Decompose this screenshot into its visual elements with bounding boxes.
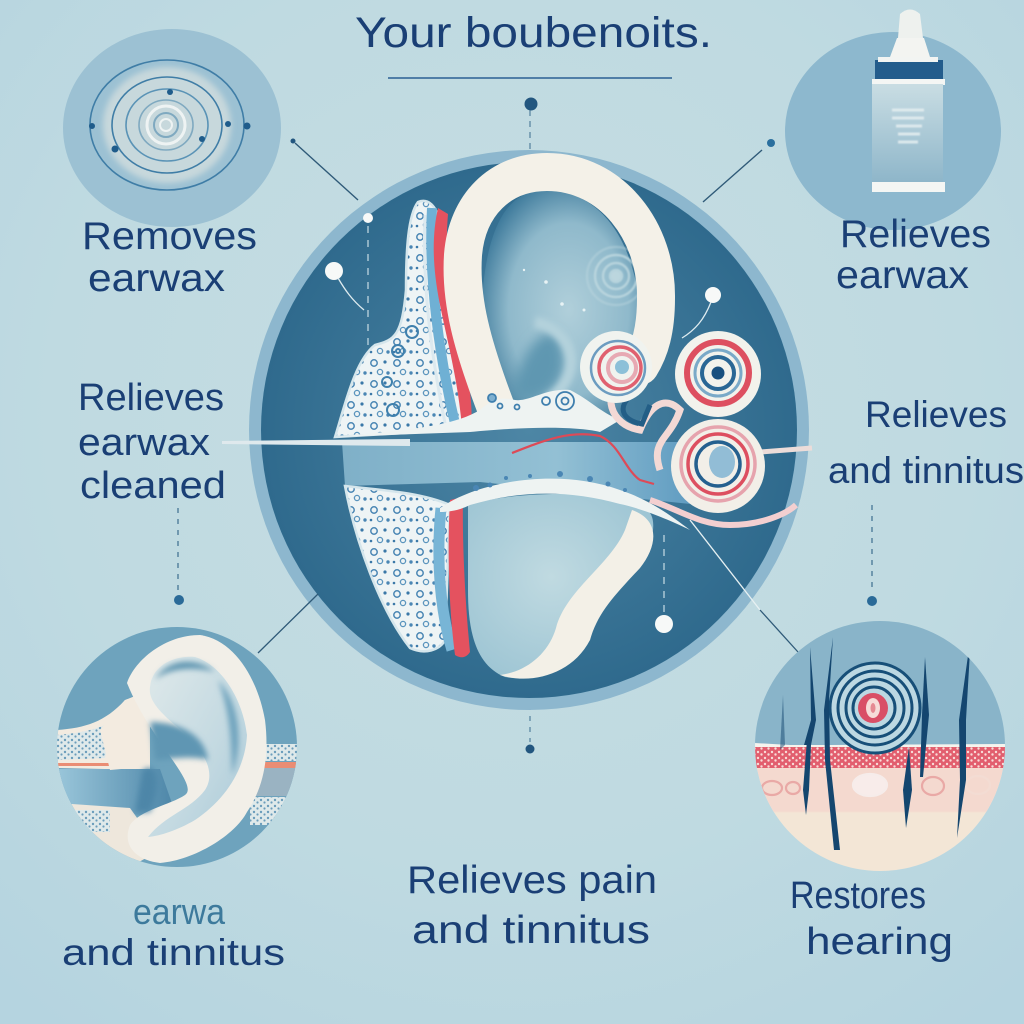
coil three — [671, 419, 765, 513]
connector: top dot — [524, 98, 538, 150]
spiral connector — [611, 370, 680, 470]
white marker: lower — [655, 535, 673, 633]
label: relieves and tinnitus — [828, 394, 1024, 491]
bottle body — [872, 84, 943, 184]
label: restores hearing: Restores — [790, 875, 926, 917]
connector: left dot — [174, 508, 184, 605]
wax specks — [89, 89, 250, 152]
bowl top shadow — [155, 662, 215, 680]
label: restores hearing — [790, 875, 953, 963]
connector: bottom dot — [526, 705, 534, 754]
label: removes earwax — [82, 215, 257, 300]
label: removes earwax: earwax — [88, 257, 226, 300]
white skin line — [755, 743, 1005, 750]
label: relieves pain and tinnitus — [407, 859, 657, 952]
canal band — [342, 442, 700, 505]
cap top rim — [878, 57, 938, 62]
right tissue — [266, 744, 297, 761]
upper tissue red layer — [434, 208, 472, 428]
outer ring — [249, 150, 809, 710]
white marker: left — [325, 262, 364, 310]
canal shadow — [135, 768, 157, 812]
connector: bottom right — [690, 520, 798, 652]
label: relieves earwax cleaned: cleaned — [80, 465, 226, 507]
bottle nozzle — [898, 10, 923, 38]
tissue lower dots — [74, 810, 110, 832]
concha shadow — [512, 333, 564, 400]
bowl centre shadow — [150, 722, 208, 760]
right stripe — [264, 762, 296, 768]
label: relieves earwax cleaned — [78, 377, 226, 507]
ear inner bowl — [148, 657, 247, 837]
label: earwax and tinnitus: and tinnitus — [62, 932, 285, 973]
bottle shoulder — [890, 38, 930, 57]
red nerve — [512, 434, 654, 484]
upper tissue — [335, 201, 470, 437]
lower tissue blue layers — [439, 508, 452, 650]
dark disc — [261, 162, 797, 698]
spiral connector core — [623, 395, 650, 424]
upper canal edge — [335, 390, 620, 437]
bottle base — [872, 182, 945, 192]
tissue blobs — [762, 773, 945, 797]
helix — [463, 172, 656, 408]
tissue upper — [57, 726, 106, 760]
label: relieves pain and tinnitus: Relieves pain — [407, 859, 657, 902]
label: restores hearing: hearing — [806, 921, 953, 963]
cream layer — [755, 765, 1005, 875]
front flesh — [57, 690, 150, 770]
ear outer shape — [127, 635, 266, 863]
label: relieves earwax cleaned: Relieves — [78, 377, 224, 419]
label: relieves earwax top right: Relieves — [840, 213, 991, 256]
wax disc — [103, 67, 231, 183]
right lower tissue — [250, 797, 290, 825]
canal — [57, 769, 175, 815]
connector: bottom left — [258, 594, 318, 653]
title: Your boubenoits. — [355, 9, 712, 57]
small sparkles — [523, 269, 586, 312]
right nerve — [760, 448, 812, 452]
lower canal dots — [473, 471, 627, 492]
bottle collar — [872, 79, 945, 85]
connector: top right — [703, 139, 775, 202]
bowl upper right shadow — [218, 680, 239, 775]
lobe — [468, 494, 653, 678]
title underline — [388, 77, 672, 79]
target spiral — [829, 662, 921, 754]
wax rings — [90, 60, 244, 190]
tissue lower — [72, 804, 144, 862]
faint rings — [587, 247, 645, 305]
tragus — [100, 700, 143, 770]
bottle label — [892, 110, 924, 142]
panel: bottom left ear — [57, 627, 298, 870]
label: earwax and tinnitus — [62, 891, 285, 973]
pink tube — [650, 500, 796, 525]
lower tissue red layer — [449, 497, 470, 657]
hairs — [780, 634, 971, 850]
red stripe — [58, 763, 109, 766]
label: relieves and tinnitus: and tinnitus — [828, 450, 1024, 491]
red band — [755, 747, 1005, 768]
upper canal dots — [488, 392, 574, 410]
panel: bottom right skin — [755, 620, 1005, 875]
concha fold — [535, 322, 571, 400]
right canal — [255, 768, 298, 796]
label: relieves pain and tinnitus: and tinnitus — [412, 909, 650, 952]
label: relieves earwax cleaned: earwax — [78, 422, 210, 464]
label: relieves earwax top right: earwax — [836, 254, 970, 297]
coil two — [675, 331, 761, 417]
connector: right dot — [867, 505, 877, 606]
tissue rings — [382, 326, 418, 416]
probe line — [222, 439, 410, 446]
label: earwax and tinnitus: earwa — [133, 891, 226, 932]
inner ear hollow — [481, 190, 640, 420]
connector: top left — [290, 138, 358, 200]
panel: top left spiral — [63, 29, 281, 227]
upper tissue blue layers — [431, 208, 456, 428]
bottle cap — [875, 60, 943, 80]
panel: central ear diagram — [222, 150, 812, 710]
coil one — [580, 331, 652, 403]
lower canal edge — [440, 479, 690, 530]
white marker: upper — [363, 213, 373, 345]
label: removes earwax: Removes — [82, 215, 257, 258]
panel: top right bottle — [785, 10, 1001, 230]
label: relieves and tinnitus: Relieves — [865, 394, 1007, 435]
lobe rim — [500, 510, 653, 679]
lower tissue — [345, 486, 450, 651]
upper tissue white layer — [424, 215, 446, 428]
pink tissue — [755, 768, 1005, 812]
label: relieves earwax top right — [836, 213, 991, 297]
white marker: right — [682, 287, 721, 338]
